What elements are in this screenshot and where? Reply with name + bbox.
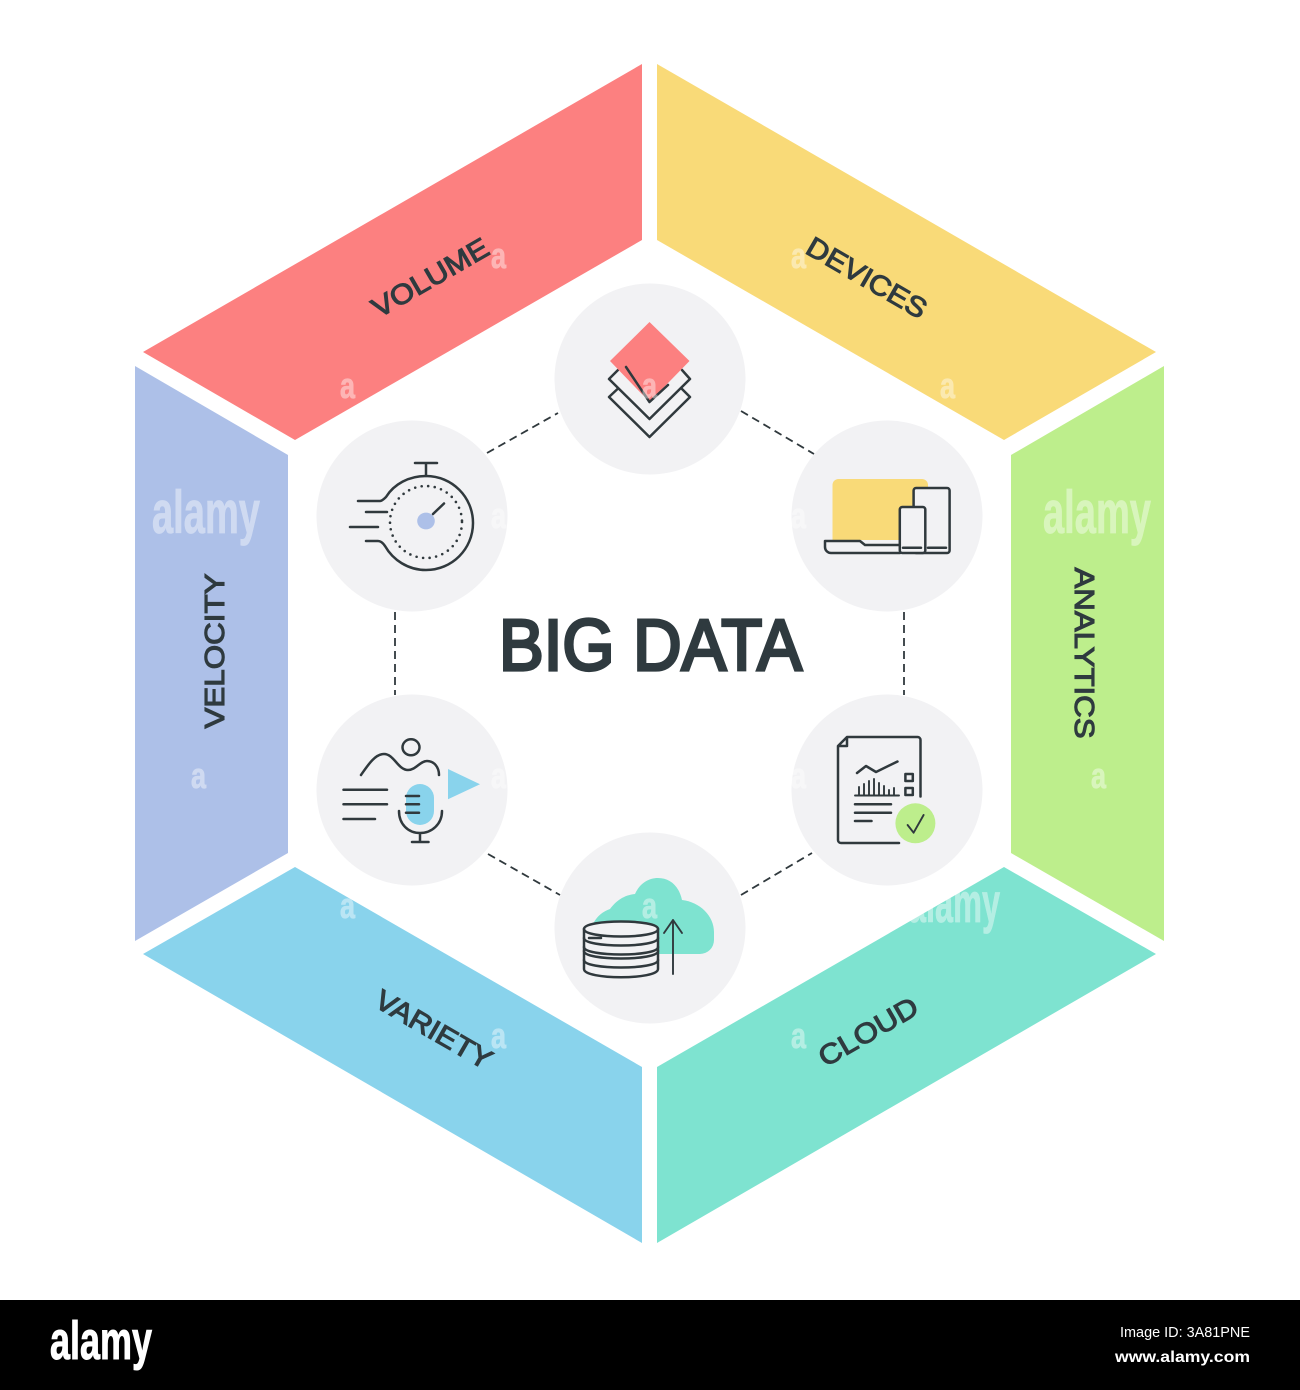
icon: report with check (792, 694, 982, 886)
panel: devices (657, 64, 1156, 440)
footer bar (0, 1300, 1300, 1390)
panel: cloud: CLOUD (813, 991, 924, 1073)
watermark: a (940, 365, 956, 406)
watermark: a (191, 755, 207, 796)
panel: velocity: VELOCITY (199, 573, 230, 728)
watermark: a (642, 885, 658, 926)
watermark: a (491, 495, 507, 536)
icon: cloud database upload (554, 832, 746, 1024)
icon: stopwatch (velocity) (316, 420, 508, 612)
watermark: alamy (908, 871, 1000, 934)
panel: analytics (1011, 366, 1164, 941)
footer bar: alamy (50, 1311, 152, 1371)
watermark: a (491, 1015, 507, 1056)
footer bar: www.alamy.com (1114, 1349, 1250, 1366)
footer bar: Image ID: 3A81PNE (1120, 1324, 1250, 1341)
title: BIG DATA (499, 606, 802, 686)
panel: volume: VOLUME (366, 232, 494, 324)
panel: variety: VARIETY (370, 984, 498, 1076)
icon: laptop and mobile devices (792, 420, 982, 612)
watermark: a (791, 1015, 807, 1056)
watermark: a (1091, 755, 1107, 796)
watermark: a (340, 885, 356, 926)
panel: volume (143, 64, 642, 440)
panel: variety (143, 867, 642, 1243)
icon: layers (volume) (554, 284, 746, 474)
watermark: a (491, 235, 507, 276)
connector lines between icons (395, 411, 904, 895)
watermark: a (642, 365, 658, 406)
watermark (152, 235, 1151, 1056)
watermark: a (491, 755, 507, 796)
watermark: a (791, 235, 807, 276)
panel: cloud (657, 867, 1156, 1243)
watermark: a (791, 755, 807, 796)
panel: velocity (135, 366, 288, 941)
icon: audio and image variety (316, 694, 508, 886)
watermark: alamy (152, 479, 260, 546)
watermark: alamy (1043, 479, 1151, 546)
panel: analytics: ANALYTICS (1069, 568, 1100, 738)
watermark: a (340, 365, 356, 406)
panel: devices: DEVICES (801, 231, 933, 325)
watermark: a (791, 495, 807, 536)
